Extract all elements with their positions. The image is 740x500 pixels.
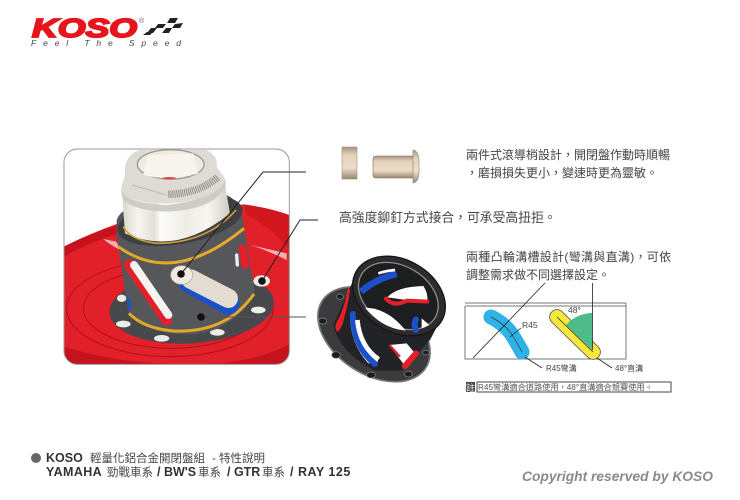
- text: cam grooves description: 兩種凸輪溝槽設計(彎溝與直溝)，可依: [466, 249, 671, 264]
- logo: KOSO: [31, 13, 183, 48]
- leader lines: [473, 283, 612, 368]
- red disc: [60, 204, 293, 368]
- flange holes: [116, 275, 270, 342]
- flange: [110, 280, 274, 344]
- tagline: Feel The Speed: [31, 38, 181, 48]
- top ring: [338, 240, 460, 352]
- inner slot blue: [361, 274, 397, 292]
- footer line 2: YAMAHA: [46, 465, 102, 479]
- callout leader: cam grooves: [197, 313, 306, 321]
- footer line 2: / BW'S: [157, 465, 196, 479]
- slot: right red: [242, 248, 245, 265]
- inner slot red: [387, 286, 427, 302]
- label: 48 degrees: 48°: [568, 305, 581, 315]
- slot: centre blue: [189, 282, 228, 303]
- label: 48 degree straight groove: 48°直溝: [615, 363, 643, 373]
- icon: roller sleeve: [342, 147, 357, 179]
- note icon: 註: [466, 382, 475, 393]
- footer line 1: 輕量化鋁合金開閉盤組: [90, 451, 205, 465]
- inner slot right blue: [422, 318, 429, 328]
- footer line 1: KOSO: [46, 451, 83, 465]
- callout leader: rivets: [258, 220, 318, 285]
- footer line 2: 車系: [198, 465, 221, 479]
- copyright: Copyright reserved by KOSO: [522, 469, 713, 484]
- slot: front white: [350, 312, 378, 363]
- icon: roller pin: [373, 150, 419, 183]
- footer line 2: / GTR: [227, 465, 260, 479]
- text: cam grooves description line 2: 調整需求做不同選擇設定。: [466, 267, 610, 282]
- roller: [171, 266, 193, 284]
- panel border: [64, 149, 289, 364]
- blue curved groove: [491, 317, 522, 352]
- slot: front blue: [353, 314, 375, 364]
- checkered flag icon: [143, 18, 183, 35]
- cam body: [117, 195, 255, 335]
- footer line 2: 勁戰車系: [107, 465, 153, 479]
- diagram frame: [465, 303, 626, 359]
- footer line 2: / RAY 125: [290, 465, 351, 479]
- top ring back: [118, 197, 242, 246]
- slot: red left: [129, 265, 167, 320]
- label: R45: R45: [522, 320, 538, 330]
- note box: [477, 382, 671, 392]
- note: [466, 382, 671, 393]
- slot: blue far left: [126, 298, 131, 310]
- text: rollers description: 兩件式滾導梢設計，開閉盤作動時順暢: [466, 147, 670, 162]
- opening: [365, 308, 406, 331]
- text: rollers description line 2: ，磨損損失更小，變速時更為靈敏。: [466, 165, 658, 180]
- note text: R45彎溝適合道路使用，48°直溝適合競賽使用。: [478, 382, 653, 392]
- nut opening: [137, 150, 204, 179]
- green sector: [566, 313, 592, 350]
- logo wordmark: KOSO: [32, 13, 137, 43]
- flange holes: [319, 294, 429, 378]
- label: R45 curved groove: R45彎溝: [546, 363, 577, 373]
- footer title: [31, 451, 351, 479]
- registered mark: ®: [139, 17, 145, 25]
- slot: left red: [335, 287, 350, 332]
- silver cylinder: [122, 175, 230, 241]
- footer line 2: 車系: [262, 465, 285, 479]
- slot: front red: [389, 343, 415, 366]
- text: rivets description: 高強度鉚釘方式接合，可承受高扭拒。: [339, 210, 557, 225]
- bullet: [31, 453, 41, 463]
- footer line 1: - 特性說明: [212, 451, 265, 465]
- yellow straight groove: [557, 317, 593, 352]
- callout leader: rollers: [177, 172, 306, 278]
- groove diagram: [465, 283, 643, 373]
- yellow rings: [118, 228, 244, 263]
- cam body: [333, 260, 444, 371]
- panel: product photo: [60, 149, 293, 368]
- flange: [300, 267, 448, 401]
- threaded nut: [121, 150, 226, 203]
- cam part illustration: [300, 240, 460, 401]
